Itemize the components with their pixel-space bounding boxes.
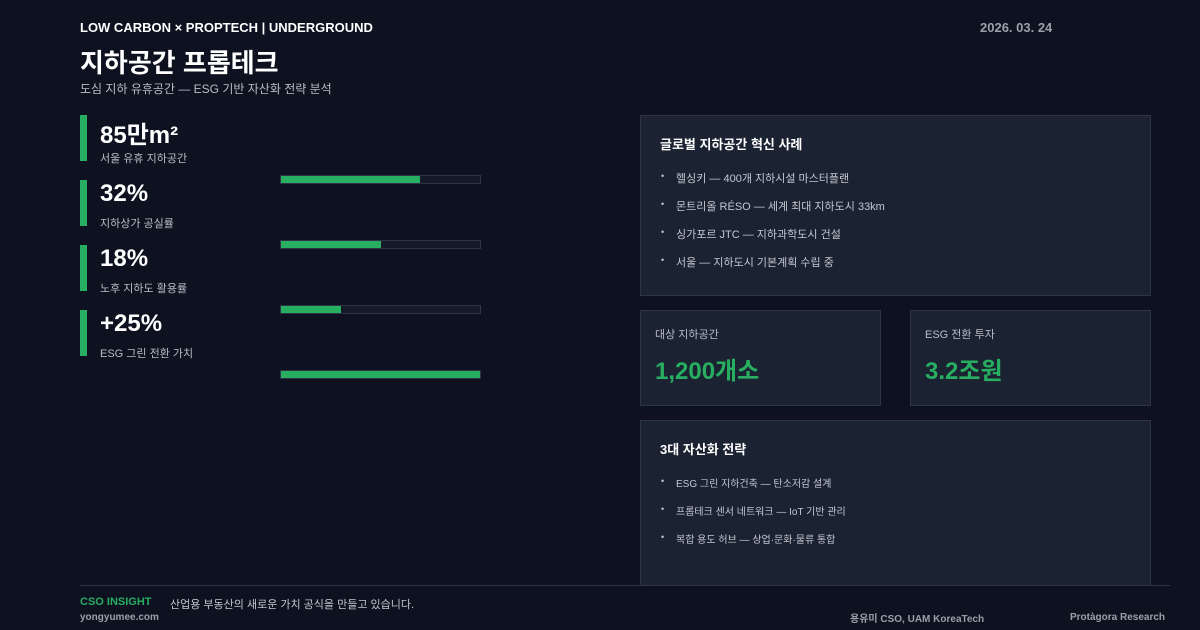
panel: target spaces: 대상 지하공간	[655, 329, 719, 341]
footer: 산업용 부동산의 새로운 가치 공식을 만들고 있습니다.	[170, 599, 414, 611]
text: 노후 지하도 활용률	[100, 283, 187, 295]
footer: 용유미 CSO, UAM KoreaTech	[850, 614, 984, 625]
footer: Protàgora Research	[1070, 612, 1165, 623]
panel: global cases: 글로벌 지하공간 혁신 사례	[660, 137, 802, 152]
panel: global cases: 싱가포르 JTC — 지하과학도시 건설	[676, 229, 841, 241]
panel: global cases: 서울 — 지하도시 기본계획 수립 중	[676, 257, 834, 269]
panel: ESG investment: ESG 전환 투자	[925, 329, 995, 341]
panel: strategies: 프롭테크 센서 네트워크 — IoT 기반 관리	[676, 507, 846, 518]
panel: strategies: 3대 자산화 전략	[660, 442, 746, 457]
footer: yongyumee.com	[80, 612, 159, 623]
text: 서울 유휴 지하공간	[100, 153, 187, 165]
footer	[80, 585, 1170, 630]
bar chart	[280, 175, 481, 379]
text: ESG 그린 전환 가치	[100, 348, 193, 360]
panel: strategies	[640, 420, 1151, 590]
panel: target spaces	[640, 310, 881, 406]
date: 2026. 03. 24	[980, 20, 1052, 35]
panel: global cases	[640, 115, 1151, 296]
panel: strategies: 복합 용도 허브 — 상업·문화·물류 통합	[676, 535, 835, 546]
panel: ESG investment	[910, 310, 1151, 406]
text: 32%	[100, 180, 148, 207]
text: +25%	[100, 310, 162, 337]
panel: ESG investment: 3.2조원	[925, 358, 1003, 385]
title: 지하공간 프롭테크	[80, 48, 279, 78]
footer: CSO INSIGHT	[80, 596, 152, 608]
stats column	[80, 115, 193, 360]
text: 18%	[100, 245, 148, 272]
panel: global cases: 몬트리올 RÉSO — 세계 최대 지하도시 33km	[676, 201, 885, 213]
header tag: LOW CARBON × PROPTECH | UNDERGROUND	[80, 20, 373, 35]
text: 지하상가 공실률	[100, 218, 174, 230]
panel: strategies: ESG 그린 지하건축 — 탄소저감 설계	[676, 479, 831, 490]
text: 85만m²	[100, 122, 178, 149]
subtitle: 도심 지하 유휴공간 — ESG 기반 자산화 전략 분석	[80, 82, 332, 96]
panel: global cases: 헬싱키 — 400개 지하시설 마스터플랜	[676, 173, 849, 185]
panel: target spaces: 1,200개소	[655, 358, 759, 385]
